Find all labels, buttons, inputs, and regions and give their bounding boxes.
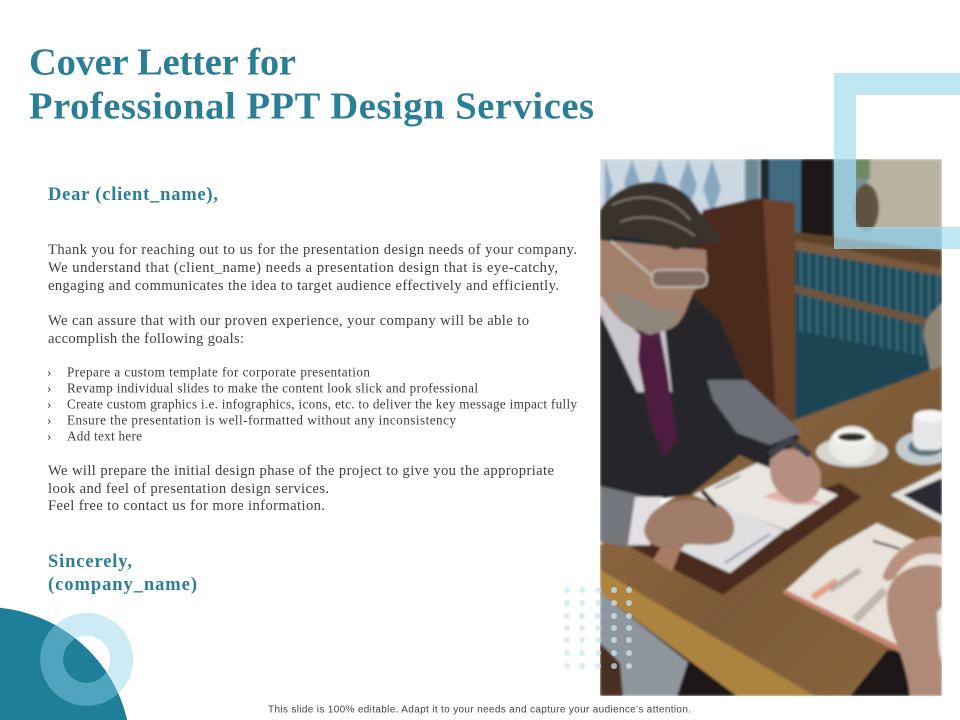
signature: Sincerely, [48,552,132,572]
decorative translucent ring [52,624,122,694]
title: Cover Letter for [29,42,296,84]
intro paragraph [48,242,577,294]
photo: blurred figure at right edge [924,303,942,387]
photo: shirt collar and tie [600,295,677,457]
decorative square frame [834,73,960,249]
greeting: Dear (client_name), [48,185,218,205]
goals bullet list: Create custom graphics i.e. infographics, icons, etc. to deliver the key message impact fully [67,396,577,412]
goals bullet list: › [47,364,51,380]
photo: legs and floor [600,593,912,696]
photo background: window and walls [600,159,942,298]
intro paragraph: engaging and communicates the idea to target audience effectively and efficiently. [48,278,559,294]
goals bullet list: › [47,380,51,396]
photo: businessman at a cafe table [600,159,954,696]
goals bullet list [47,364,577,444]
title: Professional PPT Design Services [29,86,594,128]
photo: table front edge [600,570,815,696]
footer note: This slide is 100% editable. Adapt it to your needs and capture your audience's attention. [268,704,691,716]
photo: coffee cups [816,410,954,467]
photo: leather booth [690,198,795,440]
title [29,42,594,128]
signature [48,552,197,595]
photo: tablet screen [903,478,942,516]
goals bullet list: Ensure the presentation is well-formatted without any inconsistency [67,412,456,428]
photo: woman's hands [883,537,942,696]
photo: wooden table [600,366,942,696]
photo: woman's sleeve [937,607,942,663]
goals bullet list: › [47,412,51,428]
photo: wooden ledge and blue radiator [795,232,942,430]
photo: man's suit jacket [600,293,802,547]
goals bullet list: Add text here [67,428,142,444]
goals bullet list: Revamp individual slides to make the content look slick and professional [67,380,478,396]
photo: hair [600,182,722,250]
intro paragraph: Thank you for reaching out to us for the presentation design needs of your company. [48,242,577,258]
photo: planner with leather cover [630,463,862,595]
assurance paragraph: We can assure that with our proven experience, your company will be able to [48,313,529,329]
goals bullet list: › [47,428,51,444]
assurance paragraph [48,313,529,347]
closing paragraph: We will prepare the initial design phase of the project to give you the appropriate [48,463,554,479]
goals bullet list: Prepare a custom template for corporate presentation [67,364,370,380]
closing paragraph: look and feel of presentation design services. [48,481,329,497]
photo: open notebook [783,523,942,655]
signature: (company_name) [48,575,197,595]
decorative teal quarter circle [0,608,127,720]
assurance paragraph: accomplish the following goals: [48,331,244,347]
photo: face [600,240,707,335]
closing paragraph: Feel free to contact us for more information. [48,498,325,514]
photo: tablet [891,470,942,523]
intro paragraph: We understand that (client_name) needs a presentation design that is eye-catchy, [48,260,558,276]
goals bullet list: › [47,396,51,412]
decorative dot grid [564,587,632,669]
photo: man's hands [628,436,821,548]
closing paragraph [48,463,554,514]
